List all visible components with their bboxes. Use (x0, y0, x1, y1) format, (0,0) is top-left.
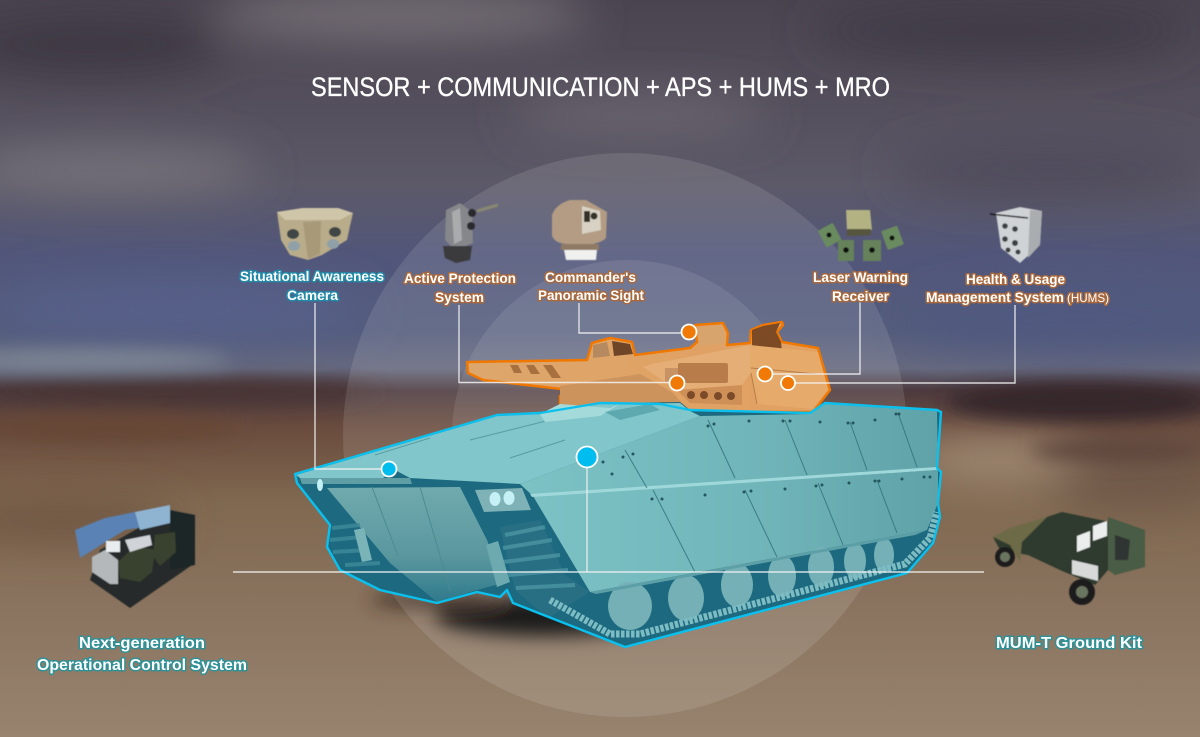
label: health and usage management system: Health & Usage (966, 271, 1065, 287)
label: next-generation operational control system: Operational Control System (37, 657, 247, 674)
translucent concentric circles (343, 153, 907, 717)
label: commander's panoramic sight (538, 269, 644, 303)
label: laser warning receiver: Receiver (832, 288, 890, 304)
label: situational awareness camera: Situational Awareness (240, 268, 384, 284)
illustration: vehicle turret highlighted orange (467, 322, 830, 412)
label: active protection system: System (435, 289, 484, 305)
label: health and usage management system (926, 271, 1109, 305)
label: situational awareness camera: Camera (287, 287, 338, 303)
label: health and usage management system: (HUMS) (1067, 291, 1109, 305)
icon: operational control system (75, 505, 195, 608)
icon: health and usage management system (990, 207, 1042, 263)
icon: situational awareness camera (277, 208, 353, 260)
label: laser warning receiver: Laser Warning (813, 269, 908, 285)
connector lines (233, 302, 1015, 572)
title: SENSOR + COMMUNICATION + APS + HUMS + MRO (311, 72, 890, 102)
label: laser warning receiver (813, 269, 908, 304)
icon: active protection system (443, 203, 498, 263)
icon: MUM-T ground kit vehicle (993, 512, 1145, 605)
label: MUM-T ground kit: MUM-T Ground Kit (996, 635, 1143, 652)
label: active protection system (404, 270, 516, 305)
label: commander's panoramic sight: Commander's (545, 269, 636, 285)
label: next-generation operational control system: Next-generation (79, 635, 205, 652)
label: health and usage management system: Management System (926, 289, 1064, 305)
label: active protection system: Active Protection (404, 270, 516, 286)
illustration: vehicle hull highlighted cyan (295, 402, 941, 647)
label: next-generation operational control system (37, 635, 247, 674)
marker dots (382, 324, 795, 476)
road wheels (608, 538, 894, 630)
icon: commander's panoramic sight (552, 200, 607, 260)
label: situational awareness camera (240, 268, 384, 303)
label: commander's panoramic sight: Panoramic Sight (538, 287, 644, 303)
icon: laser warning receiver (818, 210, 904, 261)
